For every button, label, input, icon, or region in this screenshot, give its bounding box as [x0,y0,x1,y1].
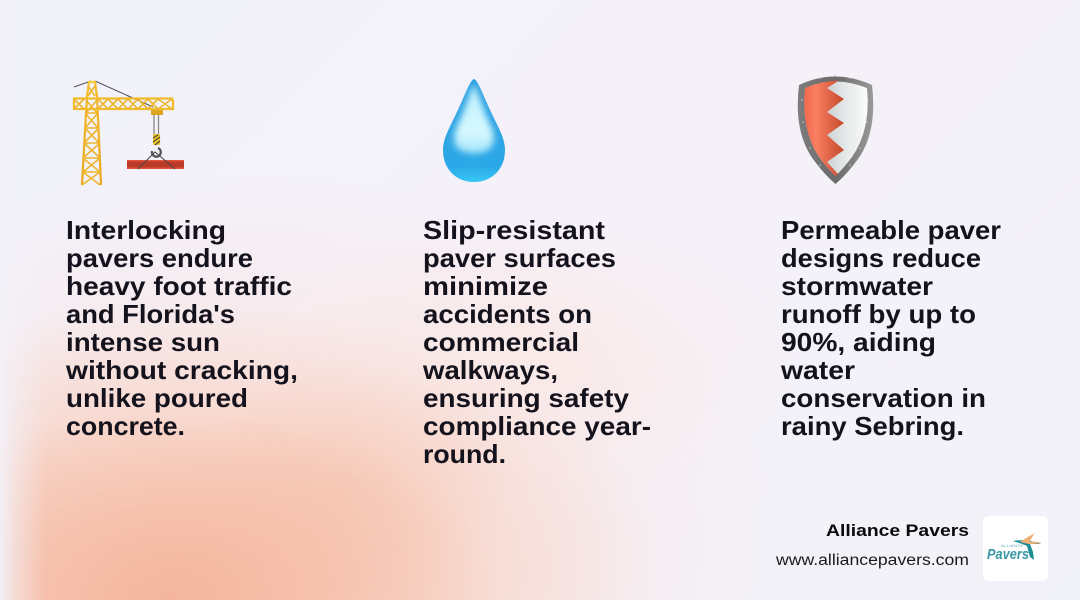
text block: slip-resistant surfaces: round. [423,439,506,469]
website url: www.alliancepavers.com [775,552,969,569]
text block: permeable designs: runoff by up to [781,299,976,329]
logo: Pavers [987,546,1029,563]
text block: slip-resistant surfaces: accidents on [423,299,592,329]
brand name: Alliance Pavers [826,521,969,540]
text block: slip-resistant surfaces: walkways, [422,355,558,385]
text block: interlocking pavers: and Florida's [66,299,235,329]
text block: interlocking pavers: concrete. [66,411,185,441]
text block: slip-resistant surfaces: ensuring safety [423,383,630,413]
icon: construction crane [74,81,184,185]
text block: slip-resistant surfaces: Slip-resistant [423,215,605,245]
text block: interlocking pavers: without cracking, [65,355,298,385]
text block: permeable designs: designs reduce [781,243,981,273]
text block: slip-resistant surfaces: paver surfaces [423,243,616,273]
text block: permeable designs: conservation in [781,383,986,413]
text block: interlocking pavers [65,215,298,441]
text block: slip-resistant surfaces: commercial [423,327,579,357]
text block: permeable designs: 90%, aiding [781,327,936,357]
text block: interlocking pavers: unlike poured [66,383,248,413]
text block: interlocking pavers: pavers endure [66,243,253,273]
text block: interlocking pavers: intense sun [66,327,220,357]
text block: permeable designs [780,215,1001,441]
text block: slip-resistant surfaces: compliance year- [423,411,651,441]
text block: slip-resistant surfaces [422,215,651,469]
text block: permeable designs: Permeable paver [781,215,1001,245]
text block: permeable designs: rainy Sebring. [781,411,964,441]
text block: interlocking pavers: heavy foot traffic [66,271,292,301]
text block: permeable designs: stormwater [781,271,933,301]
icon: water drop [443,79,505,182]
text block: interlocking pavers: Interlocking [66,215,226,245]
logo: ALLIANCE [1001,543,1023,548]
text block: slip-resistant surfaces: minimize [423,271,548,301]
logo [983,516,1048,581]
text block: permeable designs: water [780,355,855,385]
icon: shield [798,75,873,184]
